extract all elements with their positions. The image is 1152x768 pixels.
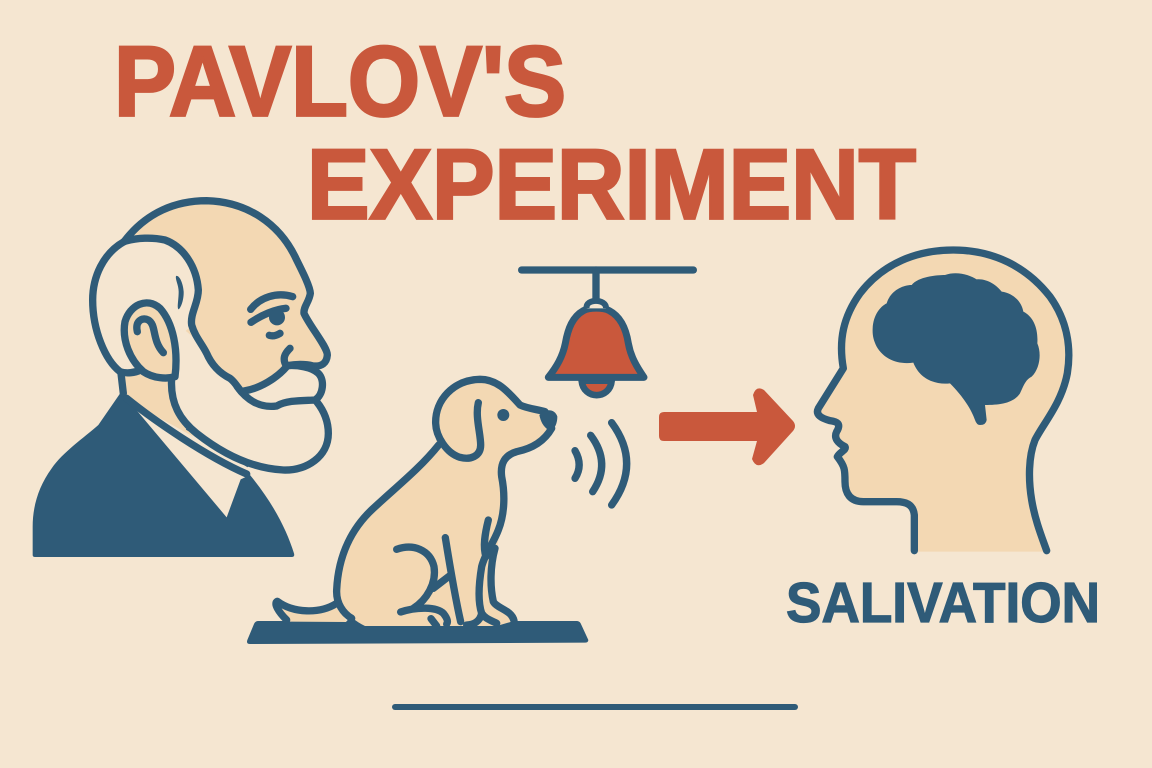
- arrow: [659, 388, 795, 465]
- stem: [585, 270, 607, 299]
- icon: dog on platform: [247, 379, 588, 644]
- bottom line: [392, 704, 798, 710]
- title: PAVLOV'S: [114, 26, 566, 136]
- suit jacket: [33, 393, 294, 557]
- face and neck skin: [122, 201, 327, 437]
- head outline: [817, 250, 1069, 551]
- ear fill: [124, 303, 176, 378]
- haunch: [397, 547, 434, 608]
- icon: bell: [522, 270, 693, 395]
- skull and nose outline: [124, 201, 327, 366]
- rear foreleg: [445, 538, 461, 622]
- head and ear outline: [436, 379, 545, 458]
- chest and front leg outline: [479, 428, 552, 623]
- brain: [873, 273, 1040, 425]
- hair outline: [93, 242, 141, 373]
- platform: [247, 617, 588, 644]
- tail: [277, 602, 347, 622]
- icon: human head with brain: [817, 250, 1069, 552]
- eye: [497, 409, 509, 421]
- hair mark: [176, 276, 184, 309]
- beard and hair light fill: [170, 323, 327, 471]
- icon: sound waves: [575, 423, 627, 505]
- eyebrow and eye: [251, 295, 293, 336]
- beard outline: [171, 378, 328, 470]
- bar: [522, 259, 693, 281]
- bell loop: [587, 301, 606, 308]
- icon: Pavlov portrait: [33, 201, 328, 557]
- collar lines: [127, 398, 247, 474]
- mouth line: [244, 348, 290, 391]
- nose: [539, 410, 557, 430]
- body back outline: [337, 445, 439, 618]
- label: salivation: SALIVATION: [786, 571, 1100, 635]
- title: [114, 26, 916, 240]
- body fill: [337, 379, 555, 626]
- moustache: [237, 366, 322, 406]
- ear outline: [124, 303, 176, 378]
- head silhouette: [817, 250, 1069, 552]
- neck: [121, 373, 123, 393]
- bell body: [548, 308, 644, 377]
- clapper: [582, 381, 612, 395]
- title: EXPERIMENT: [307, 128, 916, 240]
